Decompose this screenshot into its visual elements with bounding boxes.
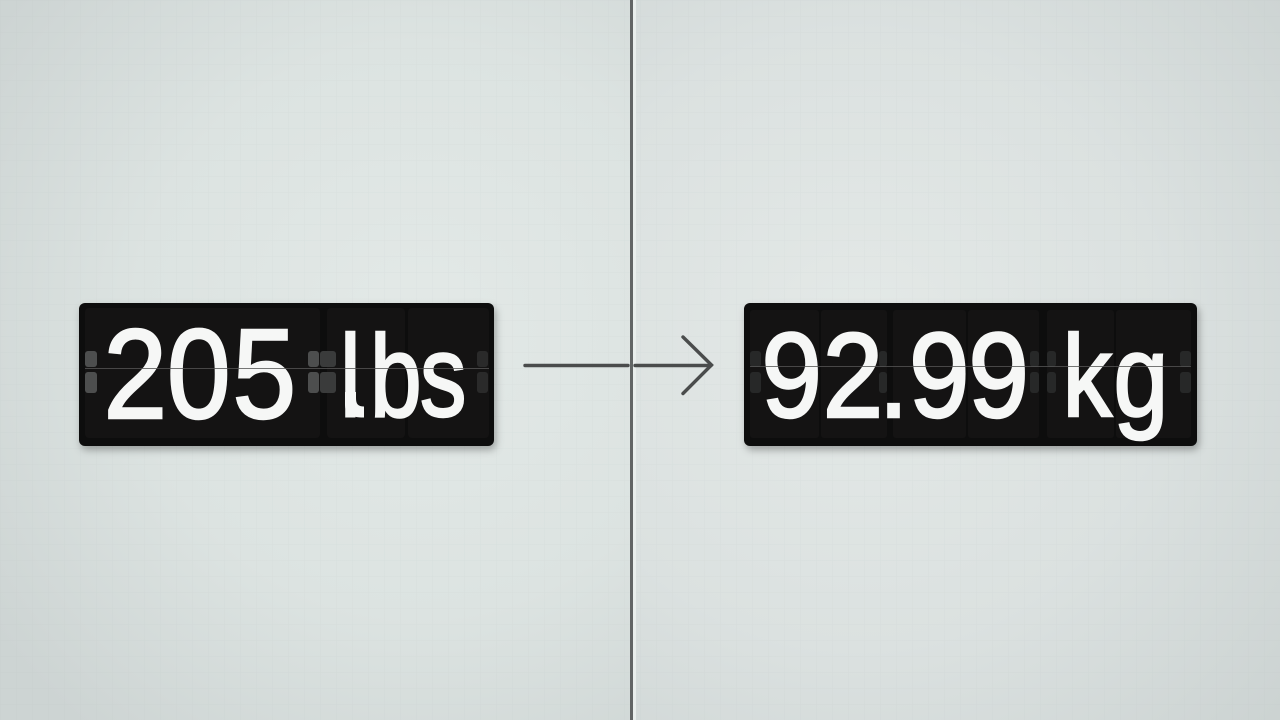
- split line: [85, 368, 489, 369]
- unit: kg: kg: [1063, 311, 1168, 441]
- hinge tabs: [750, 351, 1191, 393]
- vertical divider line: [630, 0, 636, 720]
- flip panels: [85, 308, 489, 438]
- flip panels: [750, 310, 1191, 438]
- unit: lbs: lbs: [340, 312, 466, 441]
- split line: [750, 366, 1191, 367]
- value: 205: 205: [104, 303, 296, 445]
- value: 92.99: 92.99: [761, 309, 1029, 443]
- flip board: 92.99 kg: [744, 303, 1197, 446]
- flip board: 205 lbs: [79, 303, 494, 446]
- arrow: [525, 337, 712, 394]
- hinge tabs: [85, 351, 488, 393]
